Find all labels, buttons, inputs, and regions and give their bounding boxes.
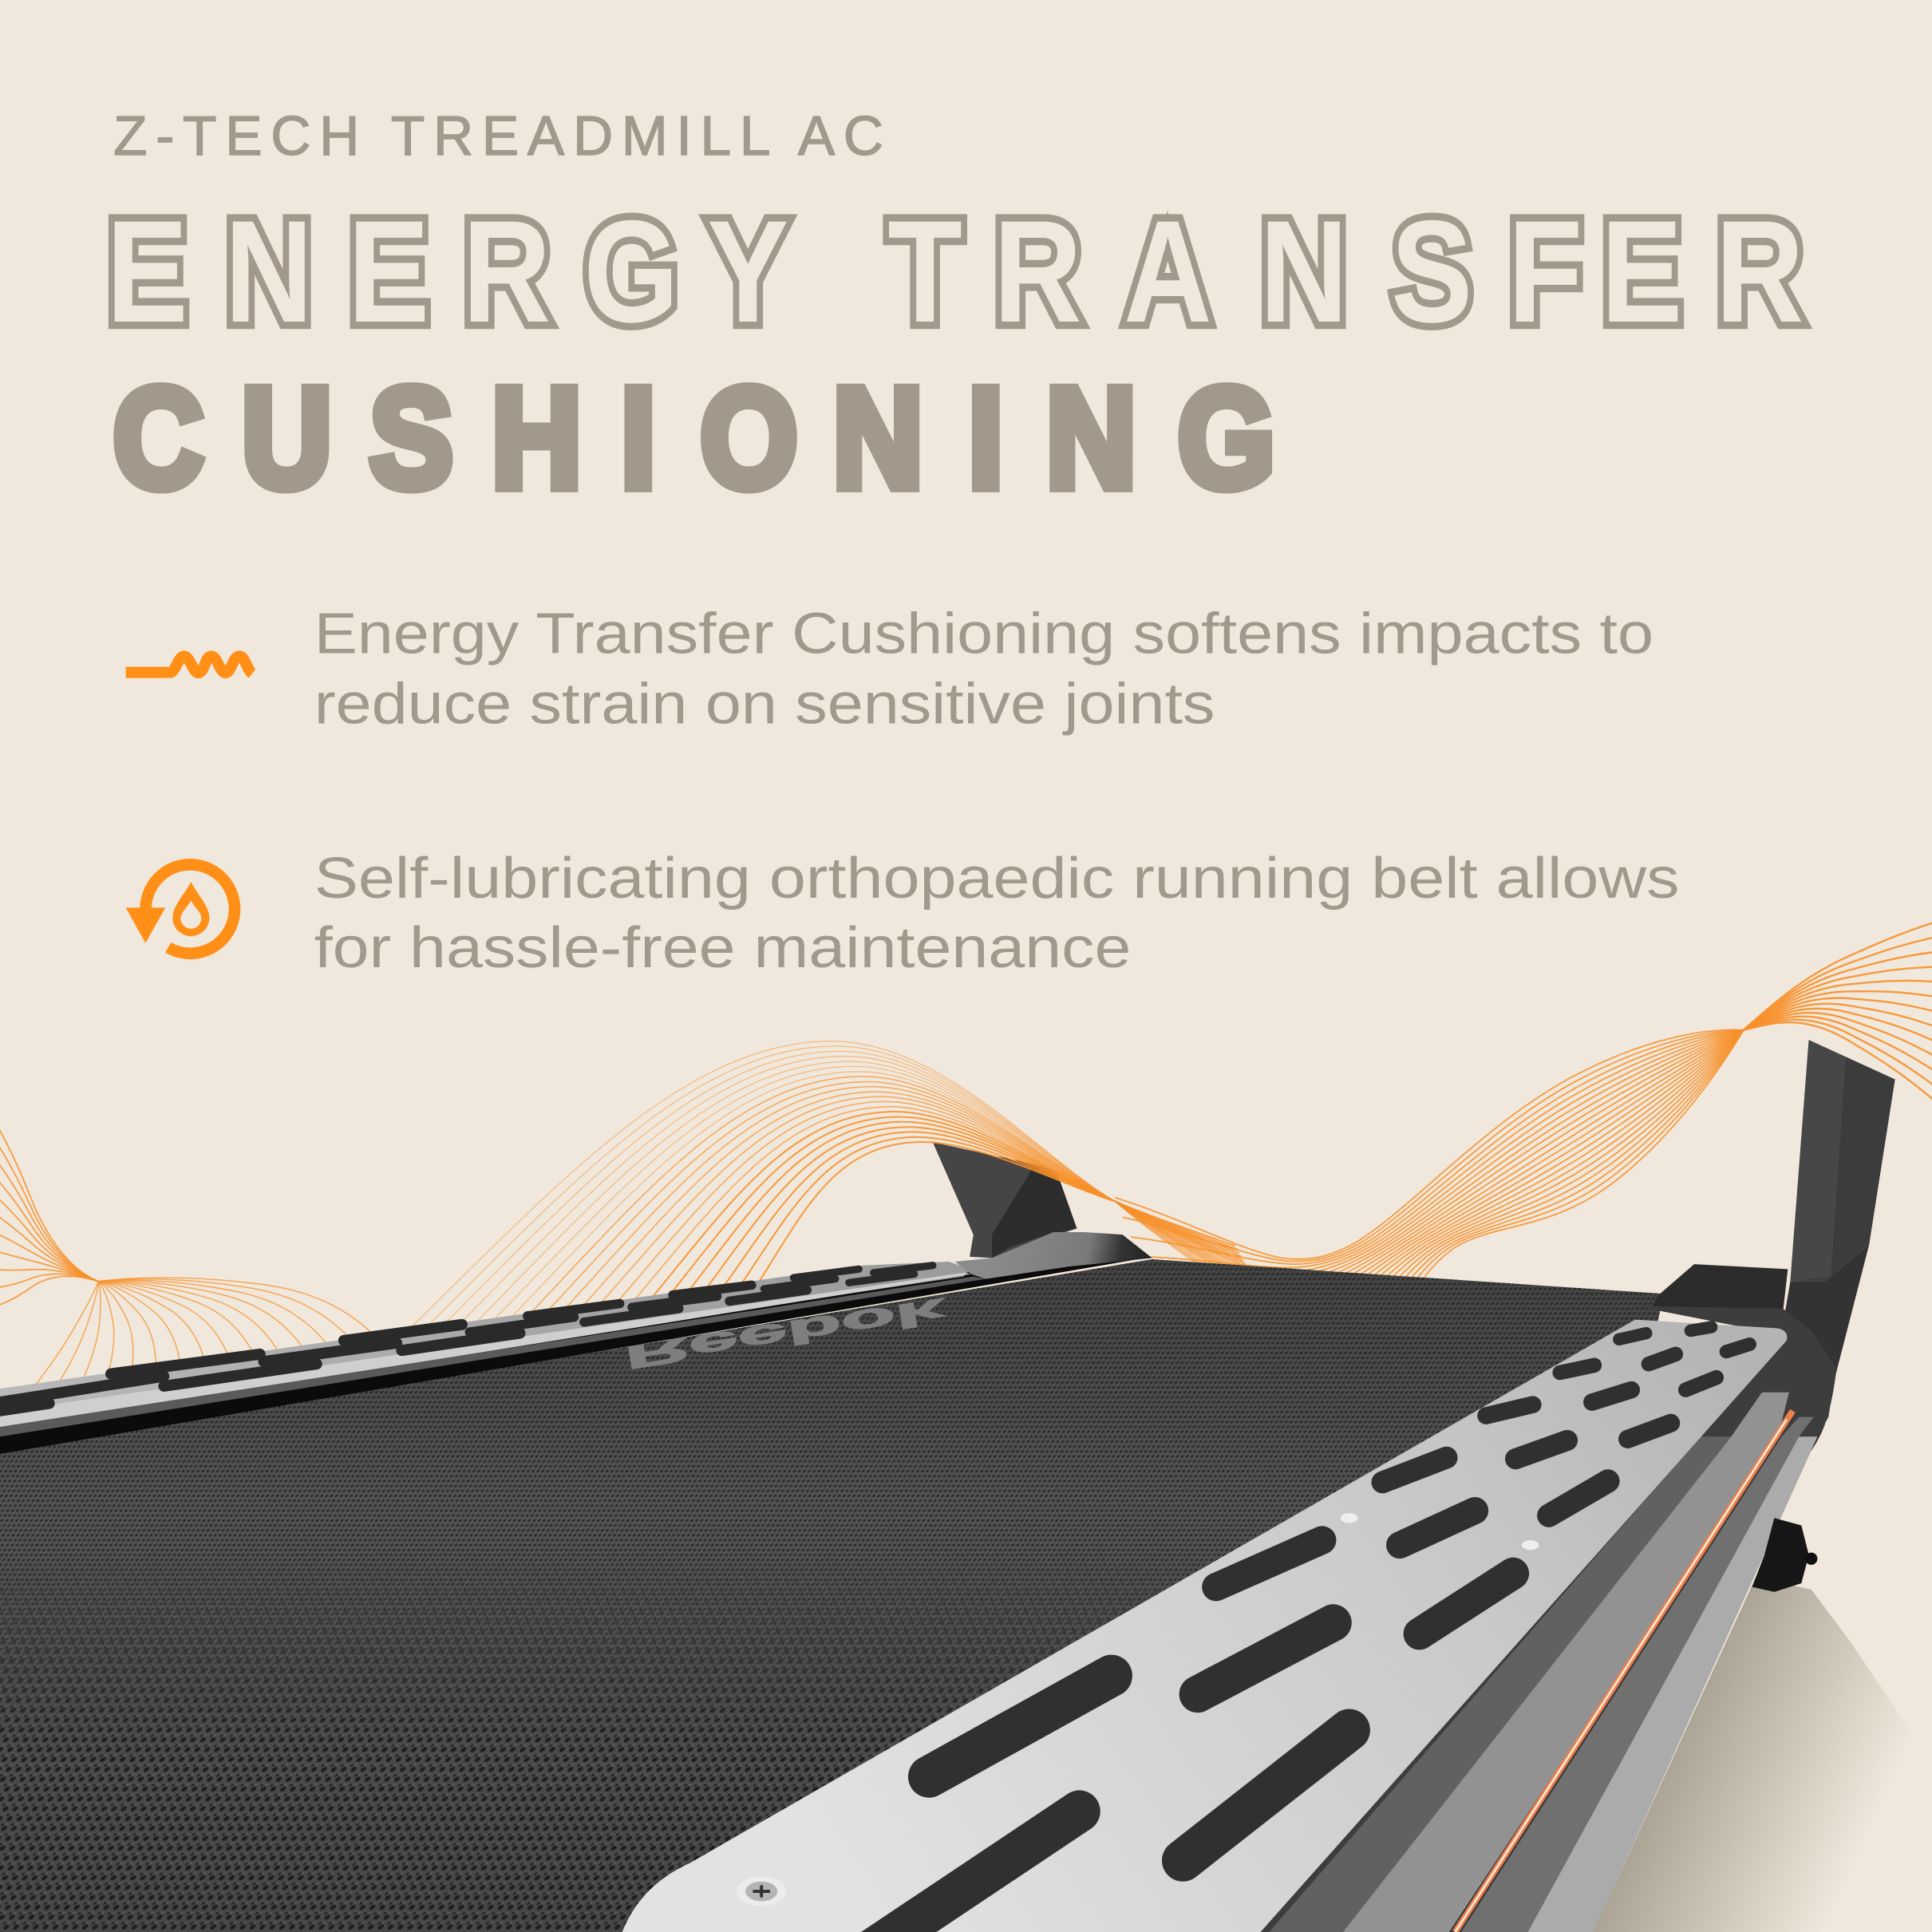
- orange flowing waves: [0, 765, 1932, 1784]
- treadmill right upright: [1694, 1040, 1895, 1528]
- plate screw: [737, 1877, 786, 1906]
- kicker: Z-Tech Treadmill AC: Z-TECH TREADMILL AC: [113, 105, 883, 167]
- text block: cushioning benefit: reduce strain on sensitive joints: [314, 671, 1215, 736]
- left rail pads: [0, 1266, 933, 1411]
- left rail connector to stand: [955, 1232, 1152, 1279]
- wave: left edge fan: [0, 1109, 99, 1366]
- wave: far right fan: [1744, 809, 1932, 1338]
- small plate screws: [1341, 1513, 1539, 1550]
- wave: rising ribbon to right pinch: [1115, 765, 1744, 1784]
- text block: cushioning benefit: [314, 601, 1653, 736]
- treadmill floor shadow: [1593, 1577, 1932, 1932]
- orange LED strip: [1455, 1411, 1793, 1932]
- wave: hump ribbon: [326, 1041, 1275, 1411]
- transport wheel: [1752, 1518, 1817, 1592]
- treadmill side body: [1261, 1306, 1836, 1932]
- left side rail: [0, 1232, 1152, 1454]
- icon: spring wave: [126, 656, 252, 674]
- icon: self-lubricating cycle with drop: [126, 864, 235, 954]
- right foot plate: [622, 1320, 1787, 1932]
- text block: belt benefit: Self-lubricating orthopaedic running belt allows: [314, 846, 1679, 911]
- treadmill left stand: [933, 1142, 1077, 1258]
- text block: belt benefit: for hassle-free maintenance: [314, 915, 1131, 980]
- text block: belt benefit: [314, 846, 1679, 980]
- text block: cushioning benefit: Energy Transfer Cushioning softens impacts to: [314, 601, 1653, 666]
- wave: left lower fan: [2, 1278, 431, 1428]
- treadmill right base bracket: [1651, 1264, 1788, 1312]
- treadmill running belt: [0, 1259, 1663, 1932]
- right plate pads: [867, 1327, 1749, 1932]
- title: Energy Transfer (outlined): ENERGY TRANSFER: [106, 190, 1804, 353]
- title: Cushioning (solid): CUSHIONING: [113, 360, 1275, 517]
- belt logo: Reebok: Reebok: [622, 1291, 949, 1377]
